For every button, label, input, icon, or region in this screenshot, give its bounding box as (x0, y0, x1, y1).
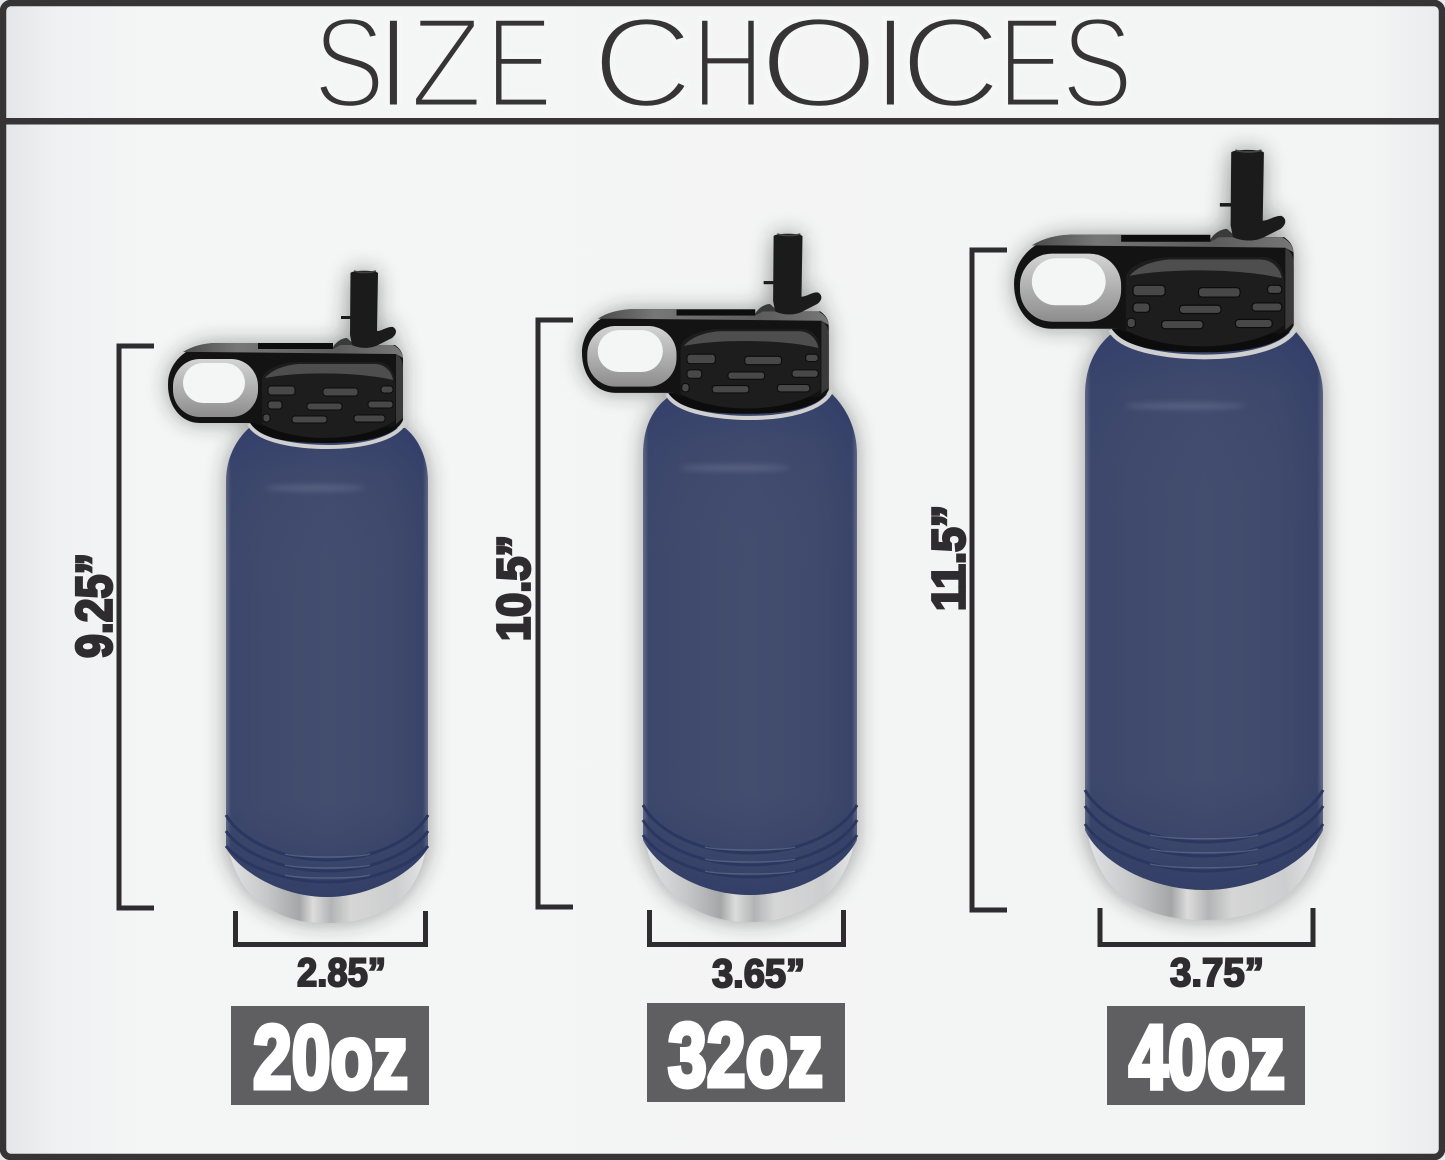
bottle: 40oz (1014, 150, 1323, 920)
cap: 20oz (168, 271, 406, 447)
height bracket: 20oz (119, 346, 154, 908)
width bracket: 32oz (650, 910, 844, 944)
height bracket: 40oz (972, 250, 1007, 910)
bottle: 20oz (168, 271, 428, 923)
size badge: 20oz: 20oz (253, 1008, 408, 1108)
height label: 32oz: 10.5” (488, 535, 540, 641)
height bracket: 32oz (538, 320, 573, 907)
height label: 20oz: 9.25” (66, 553, 122, 658)
cap: 40oz (1014, 150, 1297, 357)
size badge: 32oz: 32oz (668, 1006, 823, 1106)
cap: 32oz (582, 234, 832, 418)
bottle: 32oz (582, 234, 857, 922)
width bracket: 40oz (1100, 908, 1313, 944)
height label: 40oz: 11.5” (922, 505, 974, 611)
size badge: 40oz: 40oz (1129, 1008, 1285, 1108)
width bracket: 20oz (236, 911, 426, 944)
width label: 32oz: 3.65” (712, 952, 805, 996)
width label: 40oz: 3.75” (1170, 951, 1264, 995)
width label: 20oz: 2.85” (297, 951, 386, 995)
title (313, 0, 1133, 135)
